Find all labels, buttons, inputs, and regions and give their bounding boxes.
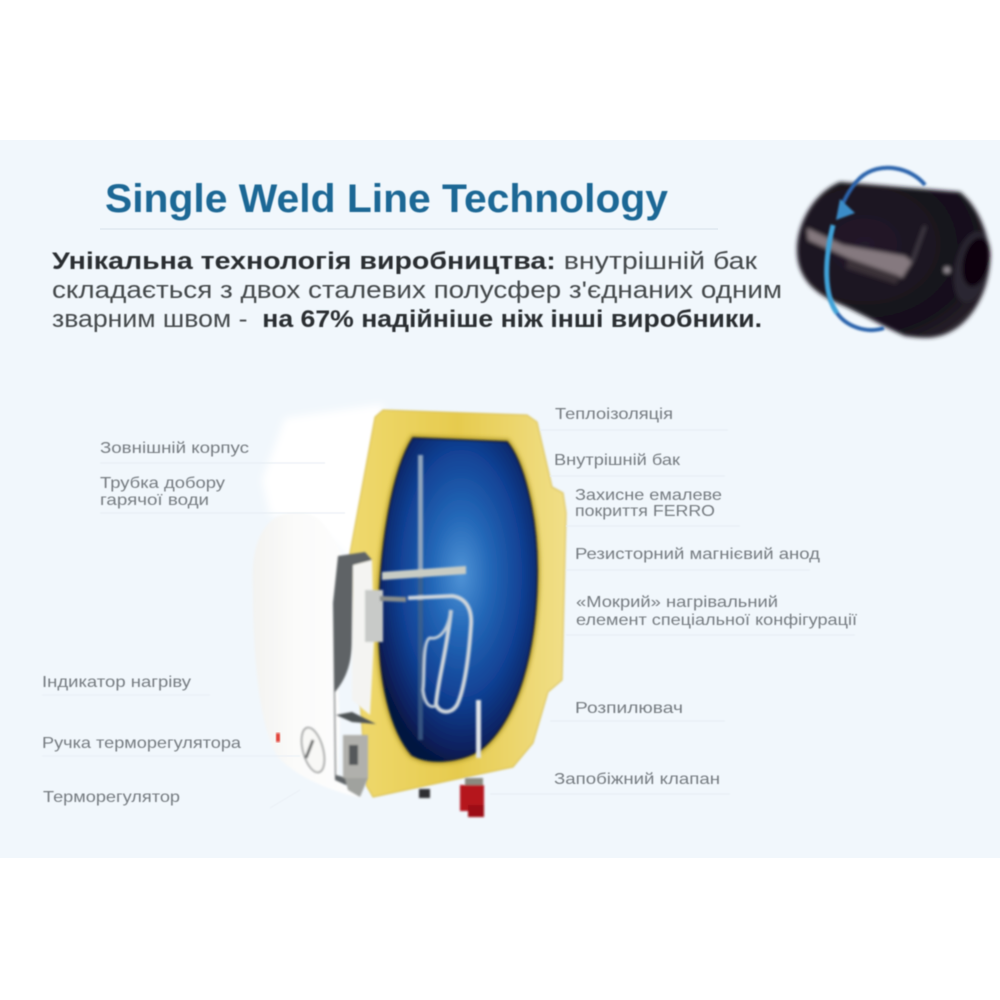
label: hot water tube: Трубка добору xyxy=(100,475,225,492)
icon: steel tank with rotating weld arrow xyxy=(797,168,996,338)
anode and pipes xyxy=(380,455,481,758)
thermostat knob xyxy=(297,725,329,775)
label: hot water tube xyxy=(100,475,345,513)
text block: description xyxy=(52,248,782,333)
text block: description: зварним швом - на 67% надійніше ніж інші виробники. xyxy=(52,306,762,333)
heating indicator xyxy=(276,733,280,742)
illustration: water heater cutaway xyxy=(253,404,566,817)
labels: left xyxy=(42,440,345,808)
label: heating element xyxy=(566,594,858,635)
label: safety valve: Запобіжний клапан xyxy=(554,771,720,788)
front cover xyxy=(253,512,362,798)
title underline xyxy=(100,228,718,230)
label: magnesium anode: Резисторний магнієвий анод xyxy=(575,546,821,563)
label: thermostat xyxy=(43,789,300,808)
cut electrics compartment xyxy=(333,552,383,797)
panel: background xyxy=(0,140,1000,858)
label: insulation: Теплоізоляція xyxy=(555,406,673,423)
tank edge shadow xyxy=(379,438,537,761)
label: sprayer: Розпилювач xyxy=(575,700,683,717)
label: outer casing: Зовнішній корпус xyxy=(100,440,249,457)
label: heating element: елемент спеціальної конфігурації xyxy=(576,612,858,629)
outer casing xyxy=(262,404,383,560)
label: enamel coating xyxy=(566,487,740,526)
label: heating element: «Мокрий» нагрівальний xyxy=(576,594,778,611)
foam insulation xyxy=(350,410,566,797)
label: thermostat knob: Ручка терморегулятора xyxy=(42,735,241,752)
safety valve and bottom fittings xyxy=(419,778,484,817)
text block: description: Унікальна технологія виробництва: внутрішній бак xyxy=(52,248,758,275)
label: enamel coating: Захисне емалеве xyxy=(575,487,722,504)
label: inner tank: Внутрішній бак xyxy=(554,452,681,469)
text block: description: складається з двох сталевих полусфер з'єднаних одним xyxy=(52,277,782,304)
title: Single Weld Line Technology xyxy=(105,177,669,221)
label: thermostat: Терморегулятор xyxy=(43,789,180,806)
label: enamel coating: покриття FERRO xyxy=(575,503,715,520)
label: hot water tube: гарячої води xyxy=(100,492,209,509)
inner tank xyxy=(379,438,537,761)
labels: right xyxy=(490,406,858,794)
label: heating indicator: Індикатор нагріву xyxy=(42,674,191,691)
